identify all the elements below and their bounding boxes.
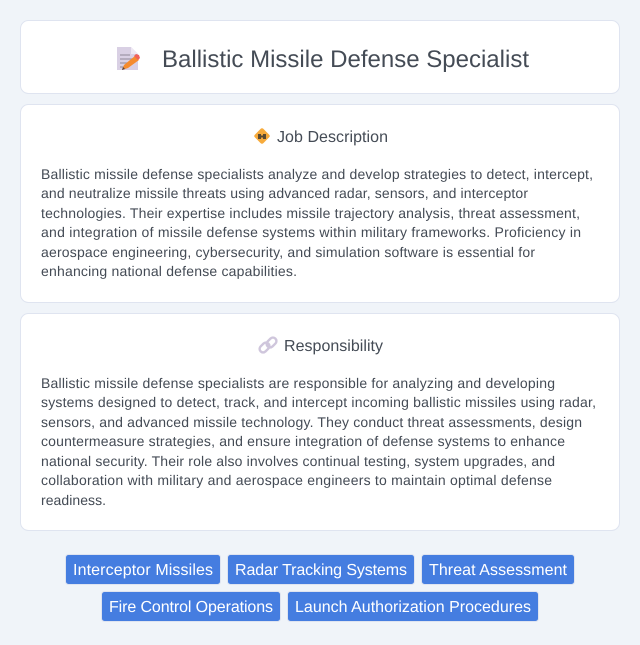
text: responsibility body: systems designed to detect, track, and intercept incoming ballistic missiles using radar, (41, 394, 596, 410)
tag: Interceptor Missiles (66, 554, 220, 584)
text: responsibility body: readiness. (41, 492, 106, 508)
text: responsibility body (41, 375, 596, 508)
icon: link (258, 336, 278, 354)
tag: Radar Tracking Systems (228, 554, 414, 584)
text: job description body: and neutralize missile threats using advanced radar, sensors, and interceptor (41, 185, 528, 201)
text: job description body: Ballistic missile defense specialists analyze and develop strategies to detect, intercept, (41, 166, 593, 182)
text: responsibility body: collaboration with military and aerospace engineers to maintain optimal defense (41, 472, 552, 488)
panel: responsibility (20, 314, 620, 530)
tag: Fire Control Operations (102, 592, 280, 622)
tag: Launch Authorization Procedures (288, 592, 538, 622)
text: job description body: enhancing national defense capabilities. (41, 263, 297, 279)
text: job description body: and integration of missile defense systems within military frameworks. Proficiency in (41, 224, 581, 240)
heading: page title: Ballistic Missile Defense Specialist (162, 46, 529, 73)
tag: Threat Assessment (422, 554, 574, 584)
text: responsibility body: sensors, and advanced missile technology. They conduct threat assessments, design (41, 414, 582, 430)
icon: memo with pencil (117, 47, 140, 70)
panel: title (20, 20, 620, 94)
tag: Threat Assessment: Threat Assessment (429, 562, 568, 579)
text: job description body: aerospace engineering, cybersecurity, and simulation software is essential for (41, 244, 535, 260)
heading: responsibility: Responsibility (284, 338, 383, 355)
text: job description body: technologies. Their expertise includes missile trajectory analysis, threat assessment, (41, 205, 580, 221)
tag: Launch Authorization Procedures: Launch Authorization Procedures (295, 599, 531, 616)
text: responsibility body: countermeasure strategies, and ensure integration of defense systems to enhance (41, 433, 565, 449)
icon: orange diamond (254, 128, 270, 144)
tag: Interceptor Missiles: Interceptor Missiles (73, 562, 213, 579)
text: job description body (41, 166, 593, 279)
heading: job description: Job Description (277, 129, 388, 146)
tag: Fire Control Operations: Fire Control Operations (109, 599, 273, 616)
text: responsibility body: national security. Their role also involves continual testing, system upgrades, and (41, 453, 555, 469)
tag: Radar Tracking Systems: Radar Tracking Systems (235, 562, 407, 579)
panel: job description (20, 104, 620, 302)
text: responsibility body: Ballistic missile defense specialists are responsible for analyzing and developing (41, 375, 555, 391)
